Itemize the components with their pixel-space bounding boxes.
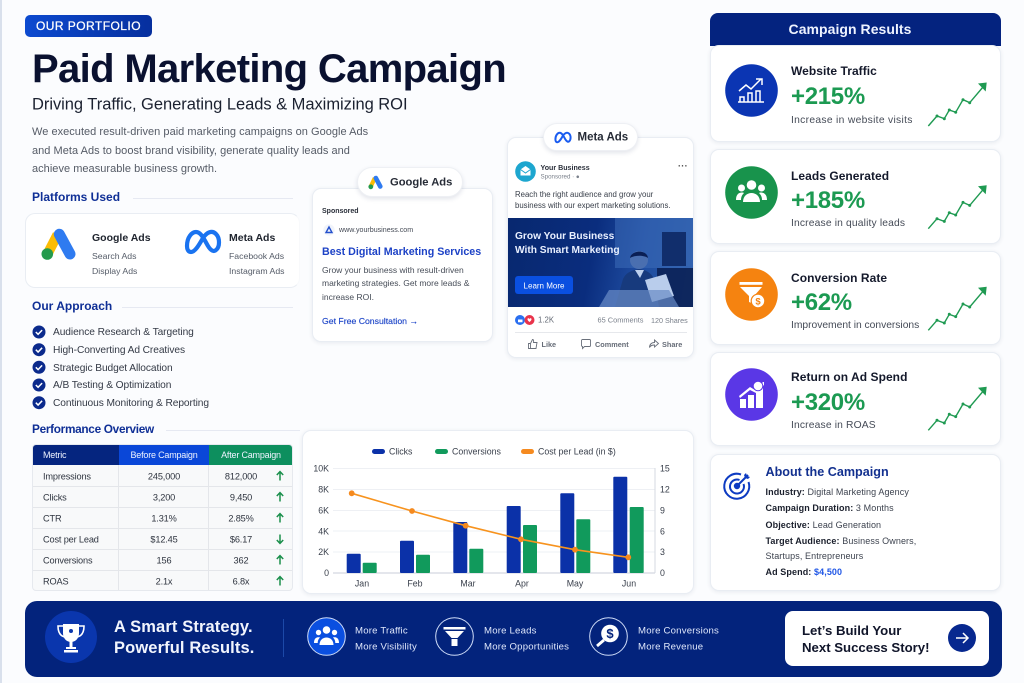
table rows: Cost per Lead xyxy=(43,534,99,544)
icon: google ads logo xyxy=(42,228,76,260)
month labels: Apr xyxy=(515,578,529,588)
heading: performance overview: Performance Overview xyxy=(32,422,154,436)
table rows: $12.45 xyxy=(150,534,178,544)
post text: business with our expert marketing solutions. xyxy=(515,201,671,210)
icon: dollar search circle xyxy=(589,617,628,656)
meta ads text: Facebook Ads xyxy=(229,251,284,261)
right axis labels: 6 xyxy=(660,526,665,536)
panel: website traffic xyxy=(710,45,1001,142)
icon: trophy xyxy=(45,611,97,663)
badge: our portfolio xyxy=(25,15,152,37)
table rows xyxy=(33,465,292,590)
table rows: 245,000 xyxy=(148,471,180,481)
metric note: Improvement in conversions xyxy=(791,320,919,331)
google ads text: Search Ads xyxy=(92,251,136,261)
intro paragraph: and Meta Ads to boost brand visibility, generate quality leads and xyxy=(32,144,350,156)
google ads text xyxy=(92,232,151,276)
about details: Objective: Lead Generation xyxy=(766,519,881,529)
conversions bars xyxy=(363,507,644,573)
table header xyxy=(33,445,292,465)
about details: Target Audience: Business Owners, xyxy=(766,536,916,546)
share action xyxy=(649,339,682,349)
icon: url favicon xyxy=(324,224,334,236)
ad body xyxy=(322,264,470,302)
table header: Metric xyxy=(43,450,66,460)
advertiser name: Your Business xyxy=(540,163,590,171)
icon: meta logo xyxy=(184,230,222,254)
benefit: leads: More Leads xyxy=(484,625,537,636)
icon: people xyxy=(725,166,778,219)
panel: chart xyxy=(302,430,694,594)
badge: our portfolio: OUR PORTFOLIO xyxy=(36,19,141,33)
intro paragraph xyxy=(32,126,368,175)
left axis labels: 4K xyxy=(318,526,329,536)
banner: call to action strip xyxy=(25,601,1002,677)
reaction icons xyxy=(515,315,534,325)
button text: Let’s Build Your xyxy=(802,622,901,638)
sparkline arrow xyxy=(928,386,987,431)
title: Paid Marketing Campaign xyxy=(32,47,506,91)
cost per lead line xyxy=(349,490,631,560)
icon: meta small logo xyxy=(554,132,572,144)
button: next success story xyxy=(785,611,989,666)
metric value: +62% xyxy=(791,289,852,316)
header: campaign results xyxy=(710,13,1001,46)
metric title: Website Traffic xyxy=(791,64,877,78)
table rows: 6.8x xyxy=(233,576,249,586)
month labels: May xyxy=(567,578,584,588)
banner headline xyxy=(114,618,254,656)
avatar xyxy=(515,161,536,182)
chart grid and axes xyxy=(333,468,655,552)
meta ads text: Instagram Ads xyxy=(229,266,285,276)
ad body: marketing strategies. Get more leads & xyxy=(322,278,469,288)
clicks bars xyxy=(347,477,627,573)
left axis labels: 10K xyxy=(313,464,329,474)
table rows: ROAS xyxy=(43,576,68,586)
button text: Next Success Story! xyxy=(802,640,930,655)
left axis labels: 8K xyxy=(318,484,329,494)
google ads text: Display Ads xyxy=(92,266,137,276)
table rows: $6.17 xyxy=(230,534,252,544)
right axis labels: 9 xyxy=(660,506,665,516)
icon: arrow circle xyxy=(948,624,976,652)
icon: funnel with coin xyxy=(725,268,778,321)
metric note: Increase in quality leads xyxy=(791,218,905,229)
benefit: traffic: More Traffic xyxy=(355,625,408,636)
right axis labels: 0 xyxy=(660,568,665,578)
learn more button: Learn More xyxy=(524,281,564,290)
icon: funnel circle xyxy=(435,617,474,656)
month labels: Jan xyxy=(355,578,369,588)
month labels: Jun xyxy=(622,578,636,588)
chart legend: Cost per Lead (in $) xyxy=(538,446,616,456)
icon: funnel with coin: $ xyxy=(755,296,761,308)
icon: people circle xyxy=(307,617,346,656)
post text xyxy=(515,190,671,210)
panel: platforms xyxy=(25,213,300,288)
subtitle: Driving Traffic, Generating Leads & Maximizing ROI xyxy=(32,96,408,114)
meta ads text xyxy=(229,232,285,276)
pill: google ads: Google Ads xyxy=(390,177,452,189)
left axis labels: 0 xyxy=(324,568,329,578)
metric title: Conversion Rate xyxy=(791,271,887,285)
left edge strip xyxy=(0,0,2,683)
call to action link: Get Free Consultation → xyxy=(322,316,418,326)
sponsored note: Sponsored · ● xyxy=(540,173,580,180)
promo image xyxy=(507,218,694,307)
banner headline: A Smart Strategy. xyxy=(114,618,253,636)
month labels: Mar xyxy=(460,578,476,588)
icon: target xyxy=(723,472,750,500)
metric title: Return on Ad Spend xyxy=(791,370,907,384)
banner headline: Powerful Results. xyxy=(114,638,254,656)
comment action xyxy=(581,339,629,350)
right axis labels: 12 xyxy=(660,484,670,494)
ad headline: Best Digital Marketing Services xyxy=(322,245,481,257)
about details: Ad Spend: $4,500 xyxy=(766,567,842,577)
about details: Industry: Digital Marketing Agency xyxy=(766,487,909,497)
about details: Campaign Duration: 3 Months xyxy=(766,503,894,513)
right axis labels xyxy=(660,464,670,578)
panel: leads generated xyxy=(710,149,1001,244)
sparkline arrow xyxy=(928,82,987,126)
list: approach checklist: Audience Research & Targeting xyxy=(53,327,194,338)
list: approach checklist xyxy=(32,326,209,410)
list: approach checklist: Continuous Monitoring & Reporting xyxy=(53,398,209,409)
table rows: 2.85% xyxy=(228,513,254,523)
share action: Share xyxy=(662,340,682,349)
panel: conversion rate xyxy=(710,251,1001,345)
left axis labels xyxy=(313,464,329,578)
table header: After Campaign xyxy=(221,450,281,460)
like action xyxy=(528,339,556,349)
table rows: 9,450 xyxy=(230,492,252,502)
chart legend: Clicks xyxy=(389,446,413,456)
benefit: leads xyxy=(435,617,569,656)
metric title: Leads Generated xyxy=(791,169,889,183)
table rows: 362 xyxy=(234,555,248,565)
panel: meta ad mockup: 120 Shares xyxy=(651,315,688,324)
photo: person at desk xyxy=(599,218,693,307)
icon: roas bars xyxy=(725,368,778,421)
benefit: leads: More Opportunities xyxy=(484,641,569,652)
meta ads text: Meta Ads xyxy=(229,232,275,244)
url: www.yourbusiness.com xyxy=(339,226,413,234)
icon: traffic chart xyxy=(725,64,778,117)
right axis labels: 3 xyxy=(660,547,665,557)
learn more button xyxy=(515,276,573,294)
benefit: conversions: More Revenue xyxy=(638,641,703,652)
benefit: conversions xyxy=(589,617,719,656)
like action: Like xyxy=(542,340,556,349)
comment action: Comment xyxy=(595,340,629,349)
about details: Startups, Entrepreneurs xyxy=(766,551,863,561)
list: approach checklist: High-Converting Ad Creatives xyxy=(53,345,185,356)
left axis labels: 6K xyxy=(318,506,329,516)
heading: platforms used: Platforms Used xyxy=(32,190,120,204)
list: approach checklist: Strategic Budget Allocation xyxy=(53,363,173,374)
benefit: traffic: More Visibility xyxy=(355,641,417,652)
table rows: 3,200 xyxy=(153,492,175,502)
table rows: Clicks xyxy=(43,492,67,502)
comments and shares counts: 65 Comments xyxy=(598,315,644,324)
benefit: traffic xyxy=(307,617,417,656)
trend arrows xyxy=(276,470,284,586)
more menu: ··· xyxy=(678,161,688,171)
heading: our approach: Our Approach xyxy=(32,299,112,313)
list: approach checklist: A/B Testing & Optimization xyxy=(53,380,171,391)
chart legend: Conversions xyxy=(452,446,501,456)
intro paragraph: We executed result-driven paid marketing campaigns on Google Ads xyxy=(32,126,368,138)
panel: meta ad mockup xyxy=(507,137,694,358)
pill: meta ads: Meta Ads xyxy=(578,131,628,143)
pill: meta ads xyxy=(543,123,638,151)
icon: dollar search circle: $ xyxy=(606,626,614,641)
month labels: Feb xyxy=(407,578,423,588)
image headline: Grow Your Business xyxy=(515,231,614,242)
about details xyxy=(766,487,916,577)
table rows: 2.1x xyxy=(156,576,172,586)
post text: Reach the right audience and grow your xyxy=(515,190,653,198)
benefit: conversions: More Conversions xyxy=(638,625,719,636)
month labels xyxy=(355,578,636,588)
header: campaign results: Campaign Results xyxy=(789,21,911,37)
google ads text: Google Ads xyxy=(92,232,151,244)
pill: google ads xyxy=(357,167,463,197)
sponsored label: Sponsored xyxy=(322,208,359,215)
metric note: Increase in ROAS xyxy=(791,420,876,431)
sparkline arrow xyxy=(928,185,987,230)
button text xyxy=(802,622,937,656)
panel: about the campaign xyxy=(710,454,1001,591)
right axis labels: 15 xyxy=(660,464,670,474)
metric value: +185% xyxy=(791,187,865,214)
panel: google ad mockup xyxy=(312,188,493,342)
left axis labels: 2K xyxy=(318,547,329,557)
table rows: 156 xyxy=(157,555,171,565)
table: before and after xyxy=(32,444,293,591)
reaction count: 1.2K xyxy=(538,315,554,324)
about heading: About the Campaign xyxy=(766,464,889,478)
metric value: +320% xyxy=(791,389,865,416)
table rows: 1.31% xyxy=(151,513,177,523)
image headline xyxy=(515,231,620,256)
intro paragraph: achieve measurable business growth. xyxy=(32,163,217,175)
panel: return on ad spend xyxy=(710,352,1001,446)
metric value: +215% xyxy=(791,83,865,110)
chart legend xyxy=(372,446,616,456)
table rows: Conversions xyxy=(43,555,92,565)
checklist icons xyxy=(32,326,46,410)
table rows: CTR xyxy=(43,513,61,523)
ad body: Grow your business with result-driven xyxy=(322,264,464,274)
table rows: 812,000 xyxy=(225,471,257,481)
table rows: Impressions xyxy=(43,471,91,481)
metric note: Increase in website visits xyxy=(791,115,913,126)
table header: Before Campaign xyxy=(130,450,198,460)
sparkline arrow xyxy=(928,286,987,331)
ad body: increase ROI. xyxy=(322,292,374,302)
icon: google ads small logo xyxy=(368,176,383,190)
image headline: With Smart Marketing xyxy=(515,245,620,256)
